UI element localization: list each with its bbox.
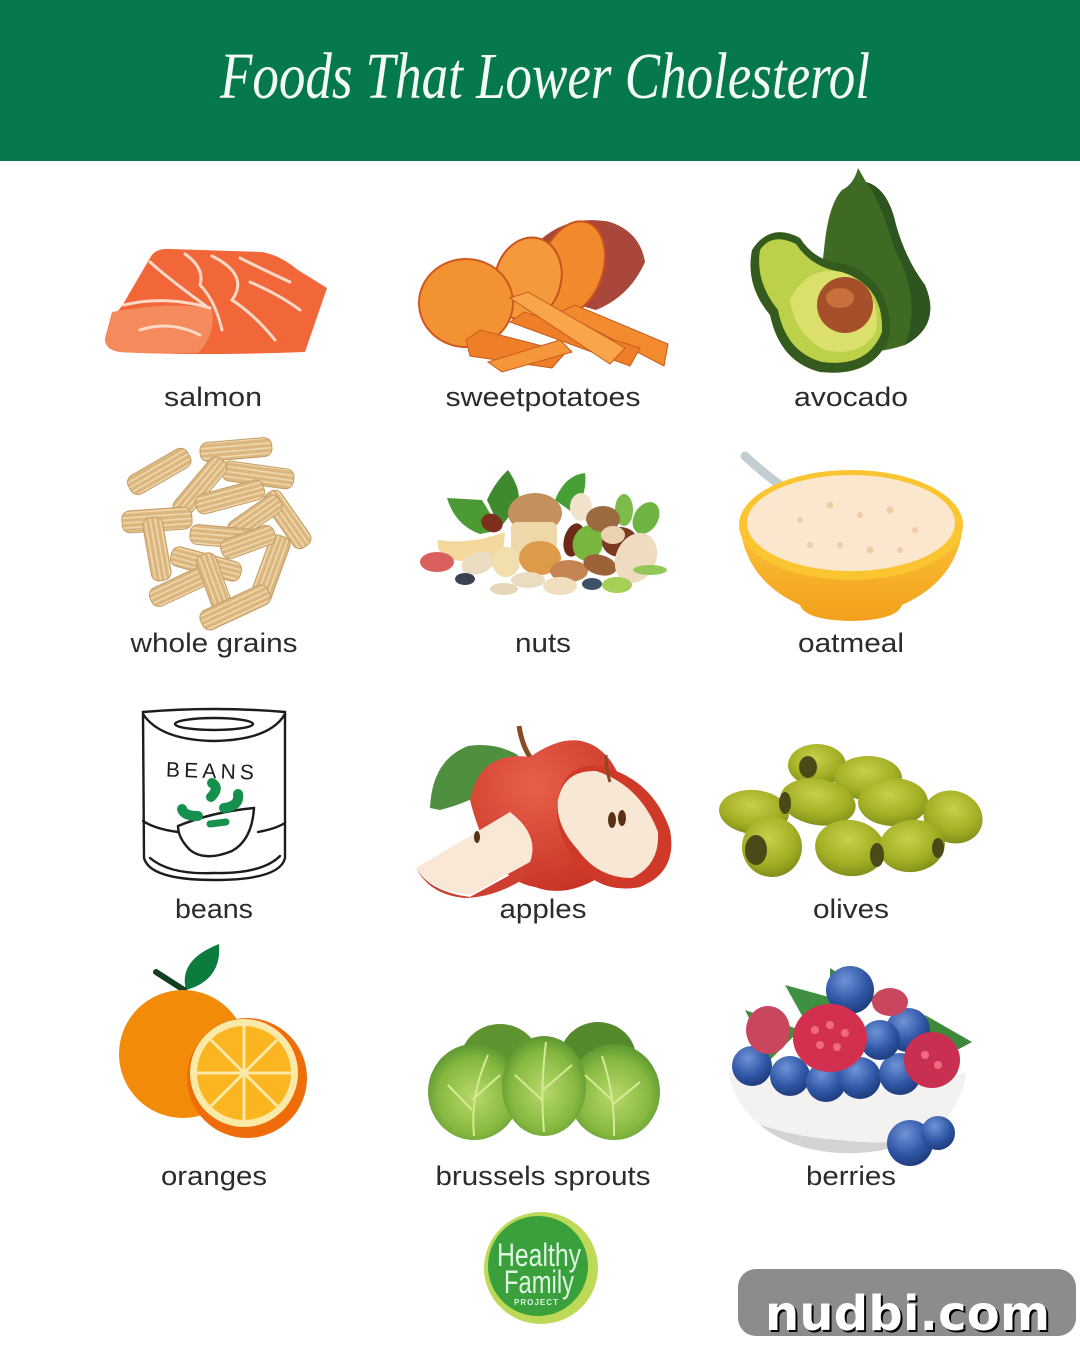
icon: oatmeal bowl — [739, 456, 963, 621]
label: nuts: nuts — [515, 628, 571, 658]
logo: Healthy Family Project — [484, 1212, 598, 1324]
icon: salmon — [105, 249, 327, 354]
label: brussels sprouts: brussels sprouts — [436, 1161, 650, 1191]
label: avocado: avocado — [794, 382, 908, 412]
icon: nuts — [420, 470, 667, 595]
label: sweetpotatoes: sweetpotatoes — [446, 382, 640, 412]
label: olives: olives — [813, 894, 889, 924]
label: berries: berries — [806, 1161, 896, 1191]
label: salmon: salmon — [164, 382, 262, 412]
icon: olives — [717, 744, 990, 881]
label: apples: apples — [500, 894, 586, 924]
icon: beans can — [143, 709, 285, 880]
icon: whole grains (penne pasta) — [121, 437, 314, 633]
logo: Healthy Family Project: Healthy — [497, 1237, 581, 1273]
icon: avocado — [750, 168, 930, 373]
title: Foods That Lower Cholesterol — [219, 40, 870, 113]
text: can label: BEANS — [166, 758, 254, 785]
logo: Healthy Family Project: Family — [504, 1264, 574, 1300]
logo: Healthy Family Project: PROJECT — [514, 1298, 558, 1307]
header banner — [0, 0, 1080, 161]
icon: berries bowl — [728, 966, 972, 1166]
label: whole grains: whole grains — [129, 628, 298, 658]
icon: apples — [416, 726, 671, 898]
watermark: nudbi.com — [767, 1288, 1052, 1344]
watermark — [738, 1269, 1076, 1344]
watermark: nudbi.com — [765, 1286, 1050, 1342]
icon: brussels sprouts — [428, 1022, 660, 1140]
icon: sweet potatoes — [419, 213, 668, 372]
label: oatmeal: oatmeal — [798, 628, 904, 658]
icon: orange — [119, 944, 307, 1138]
label: beans: beans — [175, 894, 253, 924]
label: oranges: oranges — [161, 1161, 267, 1191]
